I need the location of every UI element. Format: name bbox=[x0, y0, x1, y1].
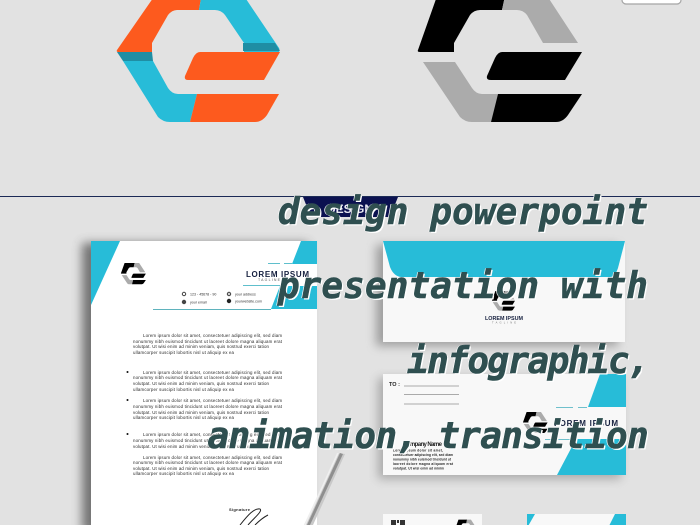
letter body text: ullamcorper suscipit lobortis nisl ut aliquip ex ea bbox=[133, 350, 235, 355]
panel: business card front bbox=[527, 514, 626, 525]
letter body text: volutpat. Ut wisi enim ad minim veniam, quis nostrud exerci tation bbox=[133, 444, 270, 449]
letter body text: volutpat. Ut wisi enim ad minim veniam, quis nostrud exerci tation bbox=[133, 410, 270, 415]
address lines bbox=[389, 382, 459, 404]
envelope brand bbox=[485, 316, 524, 324]
title: infographic, bbox=[407, 341, 648, 382]
company details: consectetuer adipiscing elit, sed diam bbox=[393, 453, 453, 457]
letter body text: Lorem ipsum dolor sit amet, consectetuer adipiscing elit, sed diam bbox=[143, 333, 282, 338]
letter body text: Lorem ipsum dolor sit amet, consectetuer adipiscing elit, sed diam bbox=[143, 432, 282, 437]
letter body text: Lorem ipsum dolor sit amet, consectetuer adipiscing elit, sed diam bbox=[143, 398, 282, 403]
navy banner: DESIGN bbox=[327, 202, 373, 216]
slip logo bbox=[523, 412, 548, 433]
title: animation, transition bbox=[208, 416, 648, 457]
envelope brand: TAGLINE bbox=[492, 320, 516, 324]
contact details bbox=[182, 292, 262, 304]
title: design powerpoint bbox=[278, 192, 648, 233]
letter body text: nonummy nibh euismod tincidunt ut laoreet dolore magna aliquam erat bbox=[133, 375, 283, 380]
slip corner shapes bbox=[545, 374, 626, 475]
letter body text: volutpat. Ut wisi enim ad minim veniam, quis nostrud exerci tation bbox=[133, 344, 270, 349]
navy banner bbox=[303, 197, 398, 217]
letterhead brand: TAGLINE bbox=[258, 278, 281, 282]
signature: Signature bbox=[229, 507, 251, 512]
qr code bbox=[391, 520, 405, 525]
letter body text: nonummy nibh euismod tincidunt ut laoreet dolore magna aliquam erat bbox=[133, 460, 283, 465]
letter body text: nonummy nibh euismod tincidunt ut laoreet dolore magna aliquam erat bbox=[133, 339, 283, 344]
frame: top right white tab bbox=[622, 0, 681, 4]
company details: volutpat. Ut wisi enim ad minim bbox=[393, 466, 444, 470]
letter body text: Lorem ipsum dolor sit amet, consectetuer adipiscing elit, sed diam bbox=[143, 455, 282, 460]
panel: business card back bbox=[383, 514, 482, 525]
logo: colour hexagon bbox=[117, 0, 280, 122]
title: presentation with bbox=[278, 266, 648, 307]
signature bbox=[229, 507, 268, 525]
letter body text: volutpat. Ut wisi enim ad minim veniam, quis nostrud exerci tation bbox=[133, 466, 270, 471]
letterhead corner shapes bbox=[91, 241, 317, 310]
icon: pen bbox=[304, 453, 345, 525]
card logo bbox=[455, 520, 477, 525]
letter body text: ullamcorper suscipit lobortis nisl ut aliquip ex ea bbox=[133, 415, 235, 420]
divider line bbox=[0, 196, 700, 197]
panel: envelope bbox=[376, 241, 625, 346]
company details: nonummy nibh euismod tincidunt ut bbox=[393, 458, 452, 462]
letter body text: ullamcorper suscipit lobortis nisl ut aliquip ex ea bbox=[133, 387, 235, 392]
company details: laoreet dolore magna aliquam erat bbox=[393, 462, 454, 466]
contact details: your email bbox=[190, 300, 207, 304]
company details bbox=[393, 442, 454, 470]
letter body text: nonummy nibh euismod tincidunt ut laoreet dolore magna aliquam erat bbox=[133, 404, 283, 409]
contact details: your address bbox=[235, 292, 256, 296]
letterhead brand: LOREM IPSUM bbox=[246, 270, 309, 279]
letter body text: ullamcorper suscipit lobortis nisl ut aliquip ex ea bbox=[133, 471, 235, 476]
company details: Lorem ipsum dolor sit amet, bbox=[393, 448, 443, 452]
envelope flap bbox=[383, 241, 625, 277]
letter body text bbox=[126, 333, 283, 476]
panel: compliment slip bbox=[378, 374, 626, 479]
slip brand: LOREM IPSUM bbox=[554, 419, 618, 428]
contact details: yourwebsite.com bbox=[235, 300, 262, 304]
letter body text: Lorem ipsum dolor sit amet, consectetuer adipiscing elit, sed diam bbox=[143, 370, 282, 375]
logo: monochrome hexagon bbox=[418, 0, 582, 122]
letter body text: volutpat. Ut wisi enim ad minim veniam, quis nostrud exerci tation bbox=[133, 381, 270, 386]
letter body text: nonummy nibh euismod tincidunt ut laoreet dolore magna aliquam erat bbox=[133, 438, 283, 443]
envelope brand: LOREM IPSUM bbox=[485, 316, 524, 322]
company details: Company Name bbox=[403, 442, 443, 448]
envelope logo bbox=[492, 291, 515, 311]
panel: letterhead bbox=[82, 241, 317, 525]
address lines: TO : bbox=[389, 382, 400, 388]
letterhead logo bbox=[121, 263, 146, 284]
contact details: 123 - 45678 - 90 bbox=[190, 292, 216, 296]
